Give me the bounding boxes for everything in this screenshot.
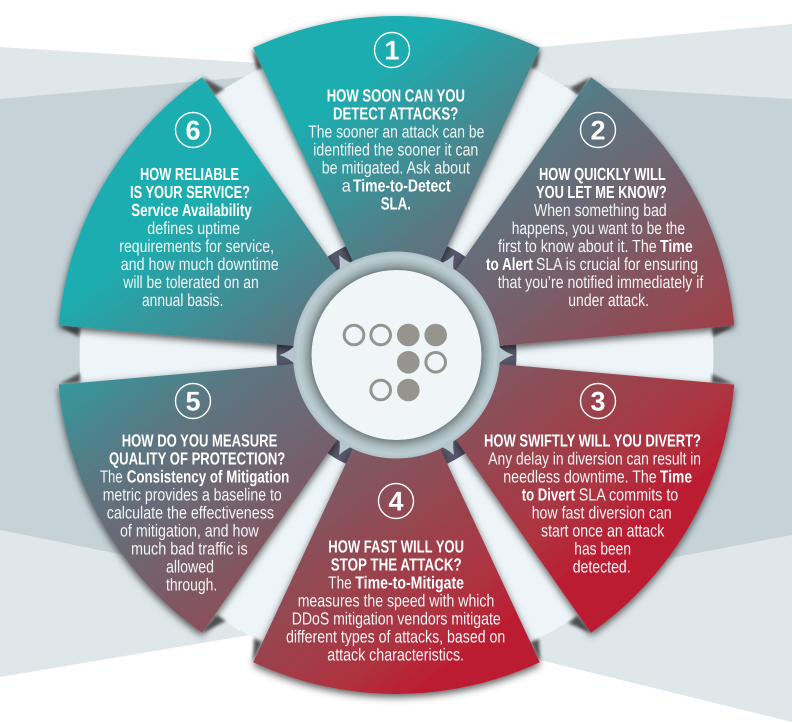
segment shape 4 — [253, 448, 540, 694]
number badge 6 — [176, 112, 210, 148]
text block 4: The — [328, 572, 352, 592]
text block 3: Time — [660, 467, 692, 487]
hub ring — [293, 252, 500, 458]
text block 6: and how much downtime — [121, 254, 279, 274]
number badge 3 — [580, 384, 616, 418]
text block 4: attack characteristics. — [327, 645, 464, 665]
corner shadows between the gaps — [59, 48, 734, 662]
number badge 1 — [374, 32, 410, 68]
text block 5: through. — [166, 575, 217, 595]
text block 1: a — [342, 176, 351, 196]
white wheel backing — [80, 38, 714, 672]
text block 2: HOW QUICKLY WILL — [539, 164, 666, 184]
text block 5: allowed — [166, 557, 214, 577]
text block 1: DETECT ATTACKS? — [333, 104, 458, 124]
text block 4: STOP THE ATTACK? — [331, 554, 462, 574]
text block 5: Consistency of Mitigation — [127, 467, 289, 487]
central hub — [280, 252, 514, 458]
hub spikes — [280, 255, 514, 455]
number badge 2: 2 — [590, 116, 606, 146]
text block 4: DDoS mitigation vendors mitigate — [292, 609, 501, 629]
text block 2: under attack. — [568, 290, 649, 310]
number badge 3: 3 — [590, 386, 606, 416]
text block 2: SLA is crucial for ensuring — [536, 254, 698, 274]
text block 2: to Alert — [486, 254, 533, 274]
text block 1: Time-to-Detect — [353, 176, 451, 196]
text block 3: detected. — [573, 557, 631, 577]
number badge 4: 4 — [388, 486, 404, 516]
text block 2: Time — [660, 236, 693, 256]
text block 6: Service Availability — [131, 200, 252, 220]
text block 5: of mitigation, and how — [120, 521, 259, 541]
text block 3: Any delay in diversion can result in — [488, 449, 701, 469]
hub disc — [312, 270, 482, 440]
segment shape 1 — [253, 16, 540, 262]
dark wedges behind the hub — [276, 235, 516, 475]
number badge 2 — [580, 112, 616, 148]
text block 3: HOW SWIFTLY WILL YOU DIVERT? — [484, 431, 701, 451]
number badge 4 — [378, 484, 414, 518]
panel 3: how swiftly will you divert — [456, 364, 734, 633]
text block 6: will be tolerated on an — [123, 272, 259, 292]
text block 6: IS YOUR SERVICE? — [130, 182, 250, 202]
text block 3: needless downtime. The — [503, 467, 657, 487]
text block 5: metric provides a baseline to — [103, 485, 282, 505]
panel 4: how fast will you stop the attack — [253, 448, 540, 694]
text block 1: The sooner an attack can be — [308, 122, 484, 142]
text block 6: defines uptime — [147, 218, 240, 238]
panel 1: how soon can you detect attacks — [253, 16, 540, 262]
text block 6: HOW RELIABLE — [140, 164, 239, 184]
text block 4: different types of attacks, based on — [286, 627, 505, 647]
background: darker band — [0, 72, 792, 610]
segment shape 2 — [456, 77, 734, 346]
text block 3: SLA commits to — [579, 485, 678, 505]
text block 4: measures the speed with which — [298, 591, 494, 611]
text block 1: identified the sooner it can — [313, 140, 478, 160]
text block 1 — [308, 86, 484, 214]
text block 5: The — [100, 467, 123, 487]
text block 6 — [119, 164, 279, 310]
text block 4: Time-to-Mitigate — [355, 572, 464, 592]
text block 1: SLA. — [381, 194, 411, 214]
icon: dot logo — [344, 325, 446, 400]
segment shape 3 — [456, 364, 734, 633]
segment shape 6 — [59, 77, 337, 346]
panel 2: how quickly will you let me know — [456, 77, 734, 346]
panel 6: how reliable is your service — [59, 77, 337, 346]
text block 2: first to know about it. The — [498, 236, 657, 256]
text block 5 — [100, 431, 289, 595]
number badge 1: 1 — [384, 36, 400, 66]
text block 2: When something bad — [534, 200, 667, 220]
number badge 5 — [176, 384, 210, 418]
text block 2: YOU LET ME KNOW? — [536, 182, 667, 202]
text block 3: how fast diversion can — [532, 503, 672, 523]
text block 2: that you’re notified immediately if — [498, 272, 703, 292]
text block 1: HOW SOON CAN YOU — [327, 86, 465, 106]
text block 2: happens, you want to be the — [512, 218, 685, 238]
segment shape 5 — [59, 364, 337, 633]
text block 1: be mitigated. Ask about — [322, 158, 470, 178]
text block 5: QUALITY OF PROTECTION? — [109, 449, 285, 469]
text block 6: requirements for service, — [119, 236, 274, 256]
text block 4: HOW FAST WILL YOU — [328, 536, 464, 556]
text block 3: has been — [574, 539, 631, 559]
text block 5: calculate the effectiveness — [107, 503, 274, 523]
text block 6: annual basis. — [142, 290, 223, 310]
number badge 5: 5 — [185, 386, 201, 416]
text block 4 — [286, 536, 505, 665]
text block 2 — [486, 164, 703, 310]
panel 5: how do you measure quality of protection — [59, 364, 337, 633]
text block 3 — [484, 431, 701, 577]
text block 3: start once an attack — [541, 521, 664, 541]
text block 3: to Divert — [522, 485, 575, 505]
number badge 6: 6 — [185, 116, 201, 146]
text block 5: much bad traffic is — [131, 539, 248, 559]
text block 5: HOW DO YOU MEASURE — [122, 431, 277, 451]
